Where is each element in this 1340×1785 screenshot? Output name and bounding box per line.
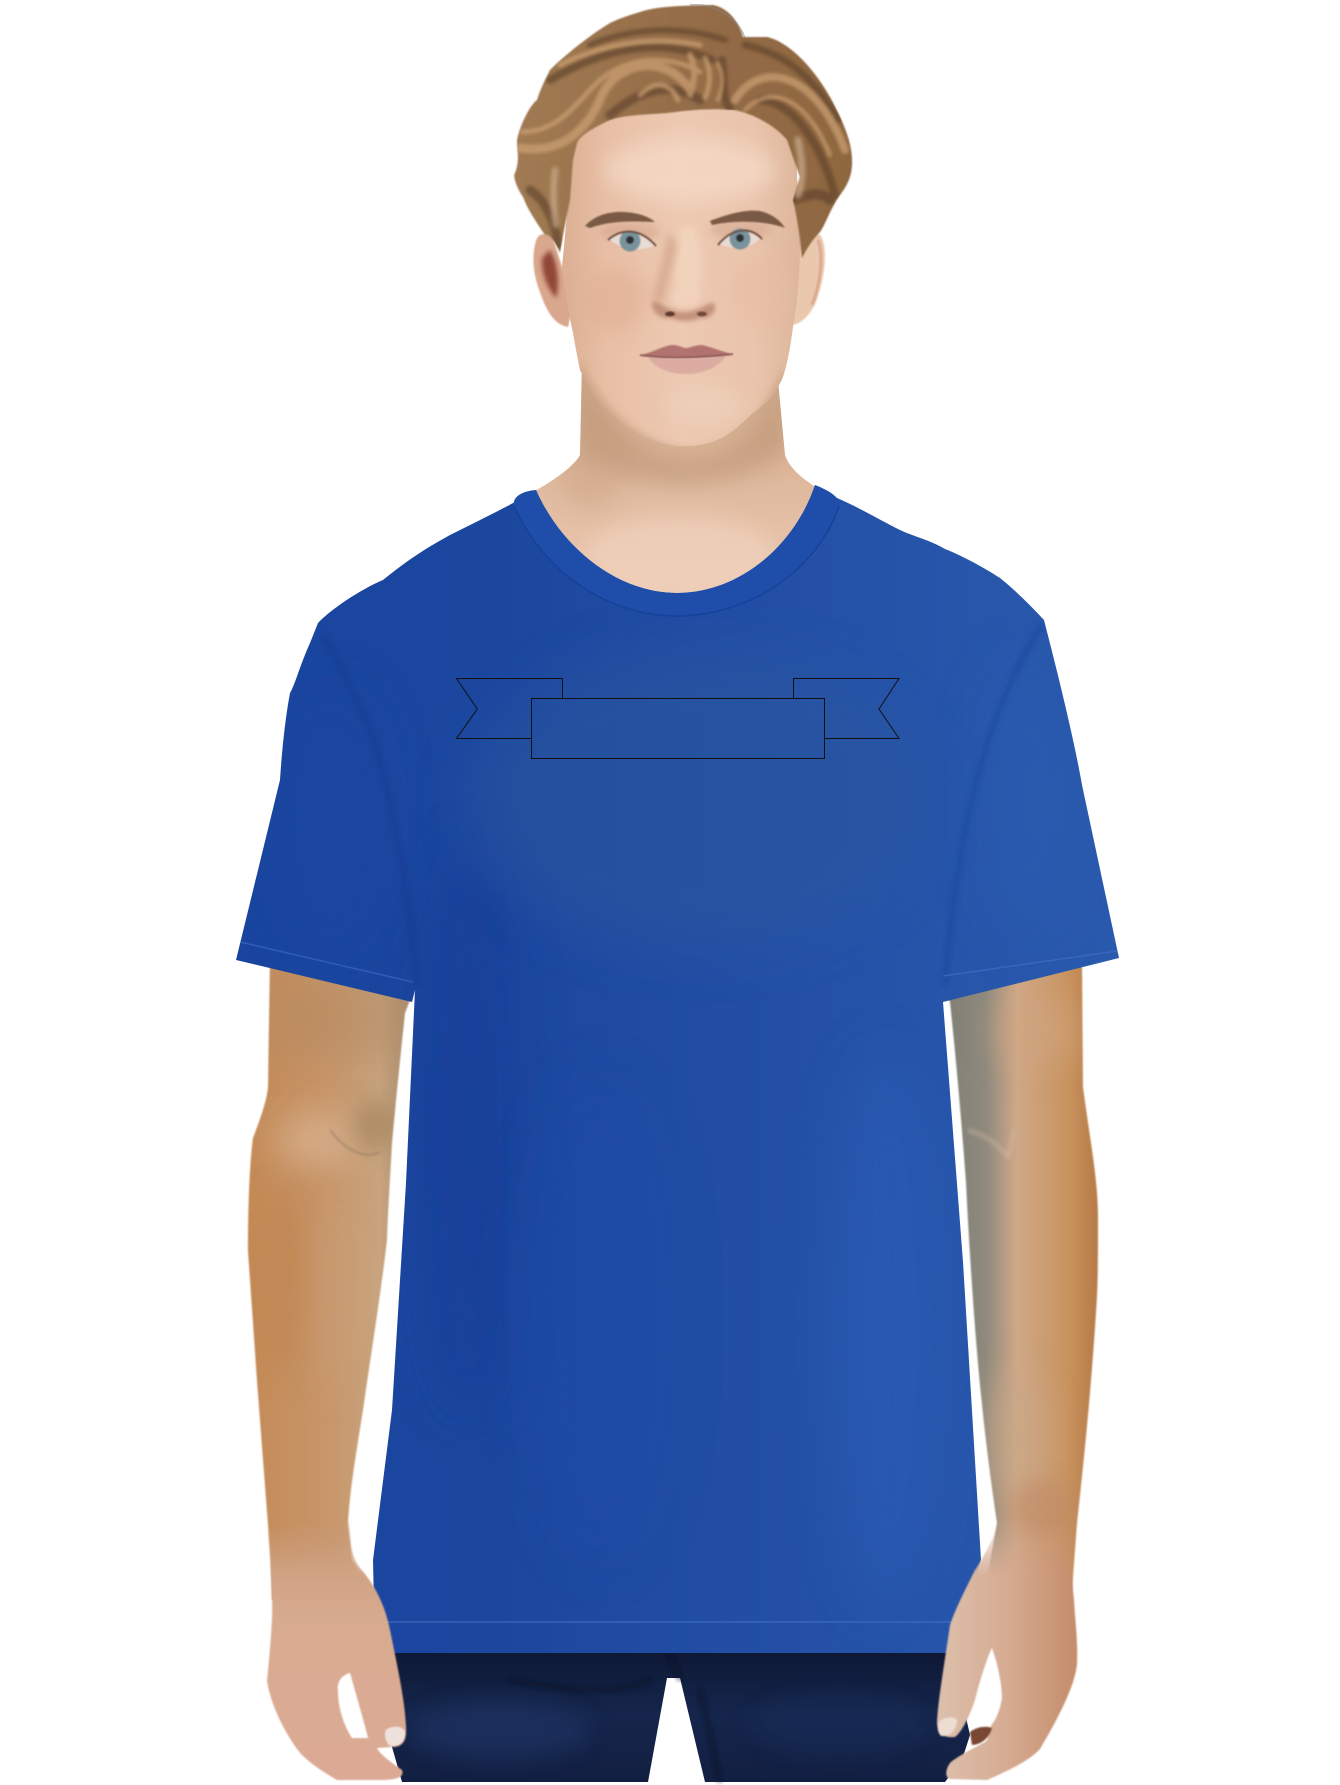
left ear [533, 234, 574, 327]
left hand [267, 1520, 406, 1780]
right hand [937, 1518, 1077, 1780]
gap between thumb and fingers [338, 1673, 368, 1738]
thumb nail [385, 1727, 405, 1746]
left sleeve seam [323, 635, 418, 985]
jeans [390, 1645, 970, 1782]
head and neck [514, 5, 852, 605]
bottom hem stitching [373, 1621, 982, 1623]
ribbon centre panel [532, 698, 824, 758]
left cuff stitching [240, 942, 413, 982]
collar [514, 485, 839, 616]
left arm [248, 960, 412, 1600]
left ribbon tail [456, 678, 562, 738]
right eyebrow [710, 211, 785, 228]
eye socket shade left [602, 222, 659, 240]
thumb nail [938, 1717, 957, 1736]
left eye [608, 230, 656, 252]
ribbon banner outline [456, 678, 899, 758]
t-shirt mockup illustration [236, 4, 1119, 1785]
light strands [520, 41, 845, 155]
finger tip behind hand [970, 1727, 992, 1745]
flyaway hair wisp [690, 5, 745, 38]
face [562, 108, 800, 446]
nose side shadow [652, 232, 678, 305]
neck [536, 373, 814, 593]
mouth [640, 345, 733, 374]
shirt shading [413, 1028, 414, 1029]
hair [514, 5, 852, 258]
chin highlight [719, 404, 722, 406]
left eyebrow [585, 212, 655, 228]
cheek colour [594, 270, 645, 329]
jaw shadow [580, 367, 784, 446]
forehead highlight [605, 138, 775, 202]
pale strands near temples [554, 140, 802, 225]
right ribbon tail [794, 678, 899, 738]
nose [652, 288, 715, 321]
dark strands [530, 30, 838, 245]
right ear [790, 233, 825, 325]
eye socket shade right [711, 222, 768, 238]
right arm [945, 960, 1098, 1590]
t-shirt [236, 485, 1119, 1653]
right sleeve seam [972, 628, 1041, 800]
right cuff stitching [943, 951, 1117, 976]
right cheek [732, 256, 788, 324]
nose bridge highlight [678, 229, 699, 288]
right eye [718, 228, 762, 250]
